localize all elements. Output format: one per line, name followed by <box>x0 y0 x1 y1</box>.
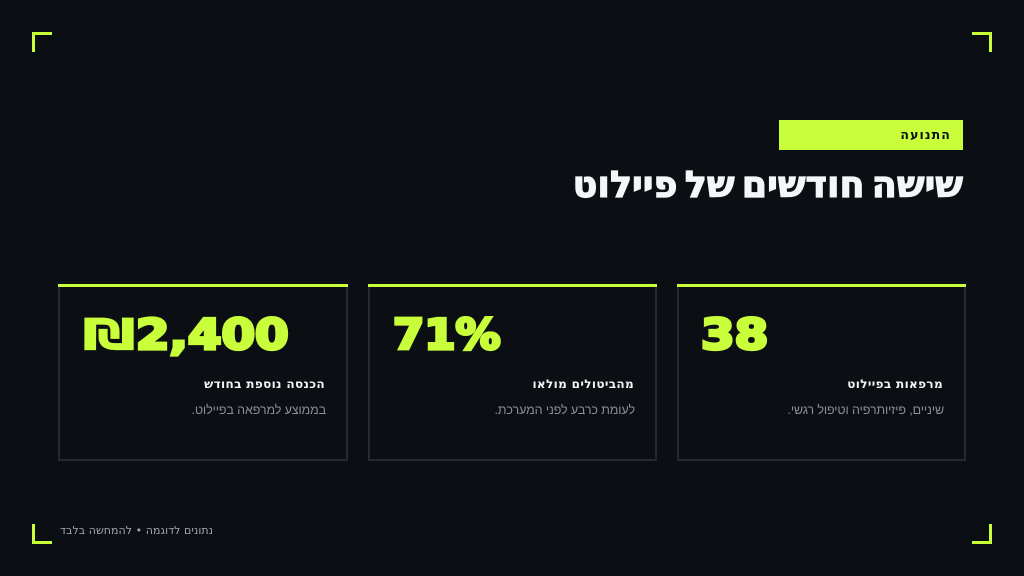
top accent bar <box>368 284 657 287</box>
panel: cancellations <box>368 284 657 461</box>
stat heading: הכנסה נוספת בחודש <box>204 377 325 391</box>
corner mark: top left <box>32 32 52 52</box>
stat number: ₪ <box>83 310 135 359</box>
stat description: בממוצע למרפאה בפיילוט. <box>192 403 326 417</box>
panel: added income <box>58 284 348 461</box>
tag: section label <box>779 120 963 150</box>
stat heading: מהביטולים מולאו <box>532 377 634 391</box>
stat description: לעומת כרבע לפני המערכת. <box>495 403 635 417</box>
stat number: 38 <box>701 310 768 359</box>
top accent bar <box>58 284 348 287</box>
corner mark: top right <box>972 32 992 52</box>
top accent bar <box>677 284 966 287</box>
corner mark: bottom left <box>32 524 52 544</box>
stat heading: מרפאות בפיילוט <box>847 377 943 391</box>
title: שישה חודשים של פיילוט <box>573 163 963 206</box>
stat number: 2,400 <box>136 310 289 359</box>
stat description: שיניים, פיזיותרפיה וטיפול רגשי. <box>788 403 944 417</box>
panel: pilot clinics <box>677 284 966 461</box>
stat number: 71% <box>393 310 501 359</box>
tag: section label: התנועה <box>900 127 951 142</box>
footer note: נתונים לדוגמה • להמחשה בלבד <box>60 524 213 537</box>
corner mark: bottom right <box>972 524 992 544</box>
